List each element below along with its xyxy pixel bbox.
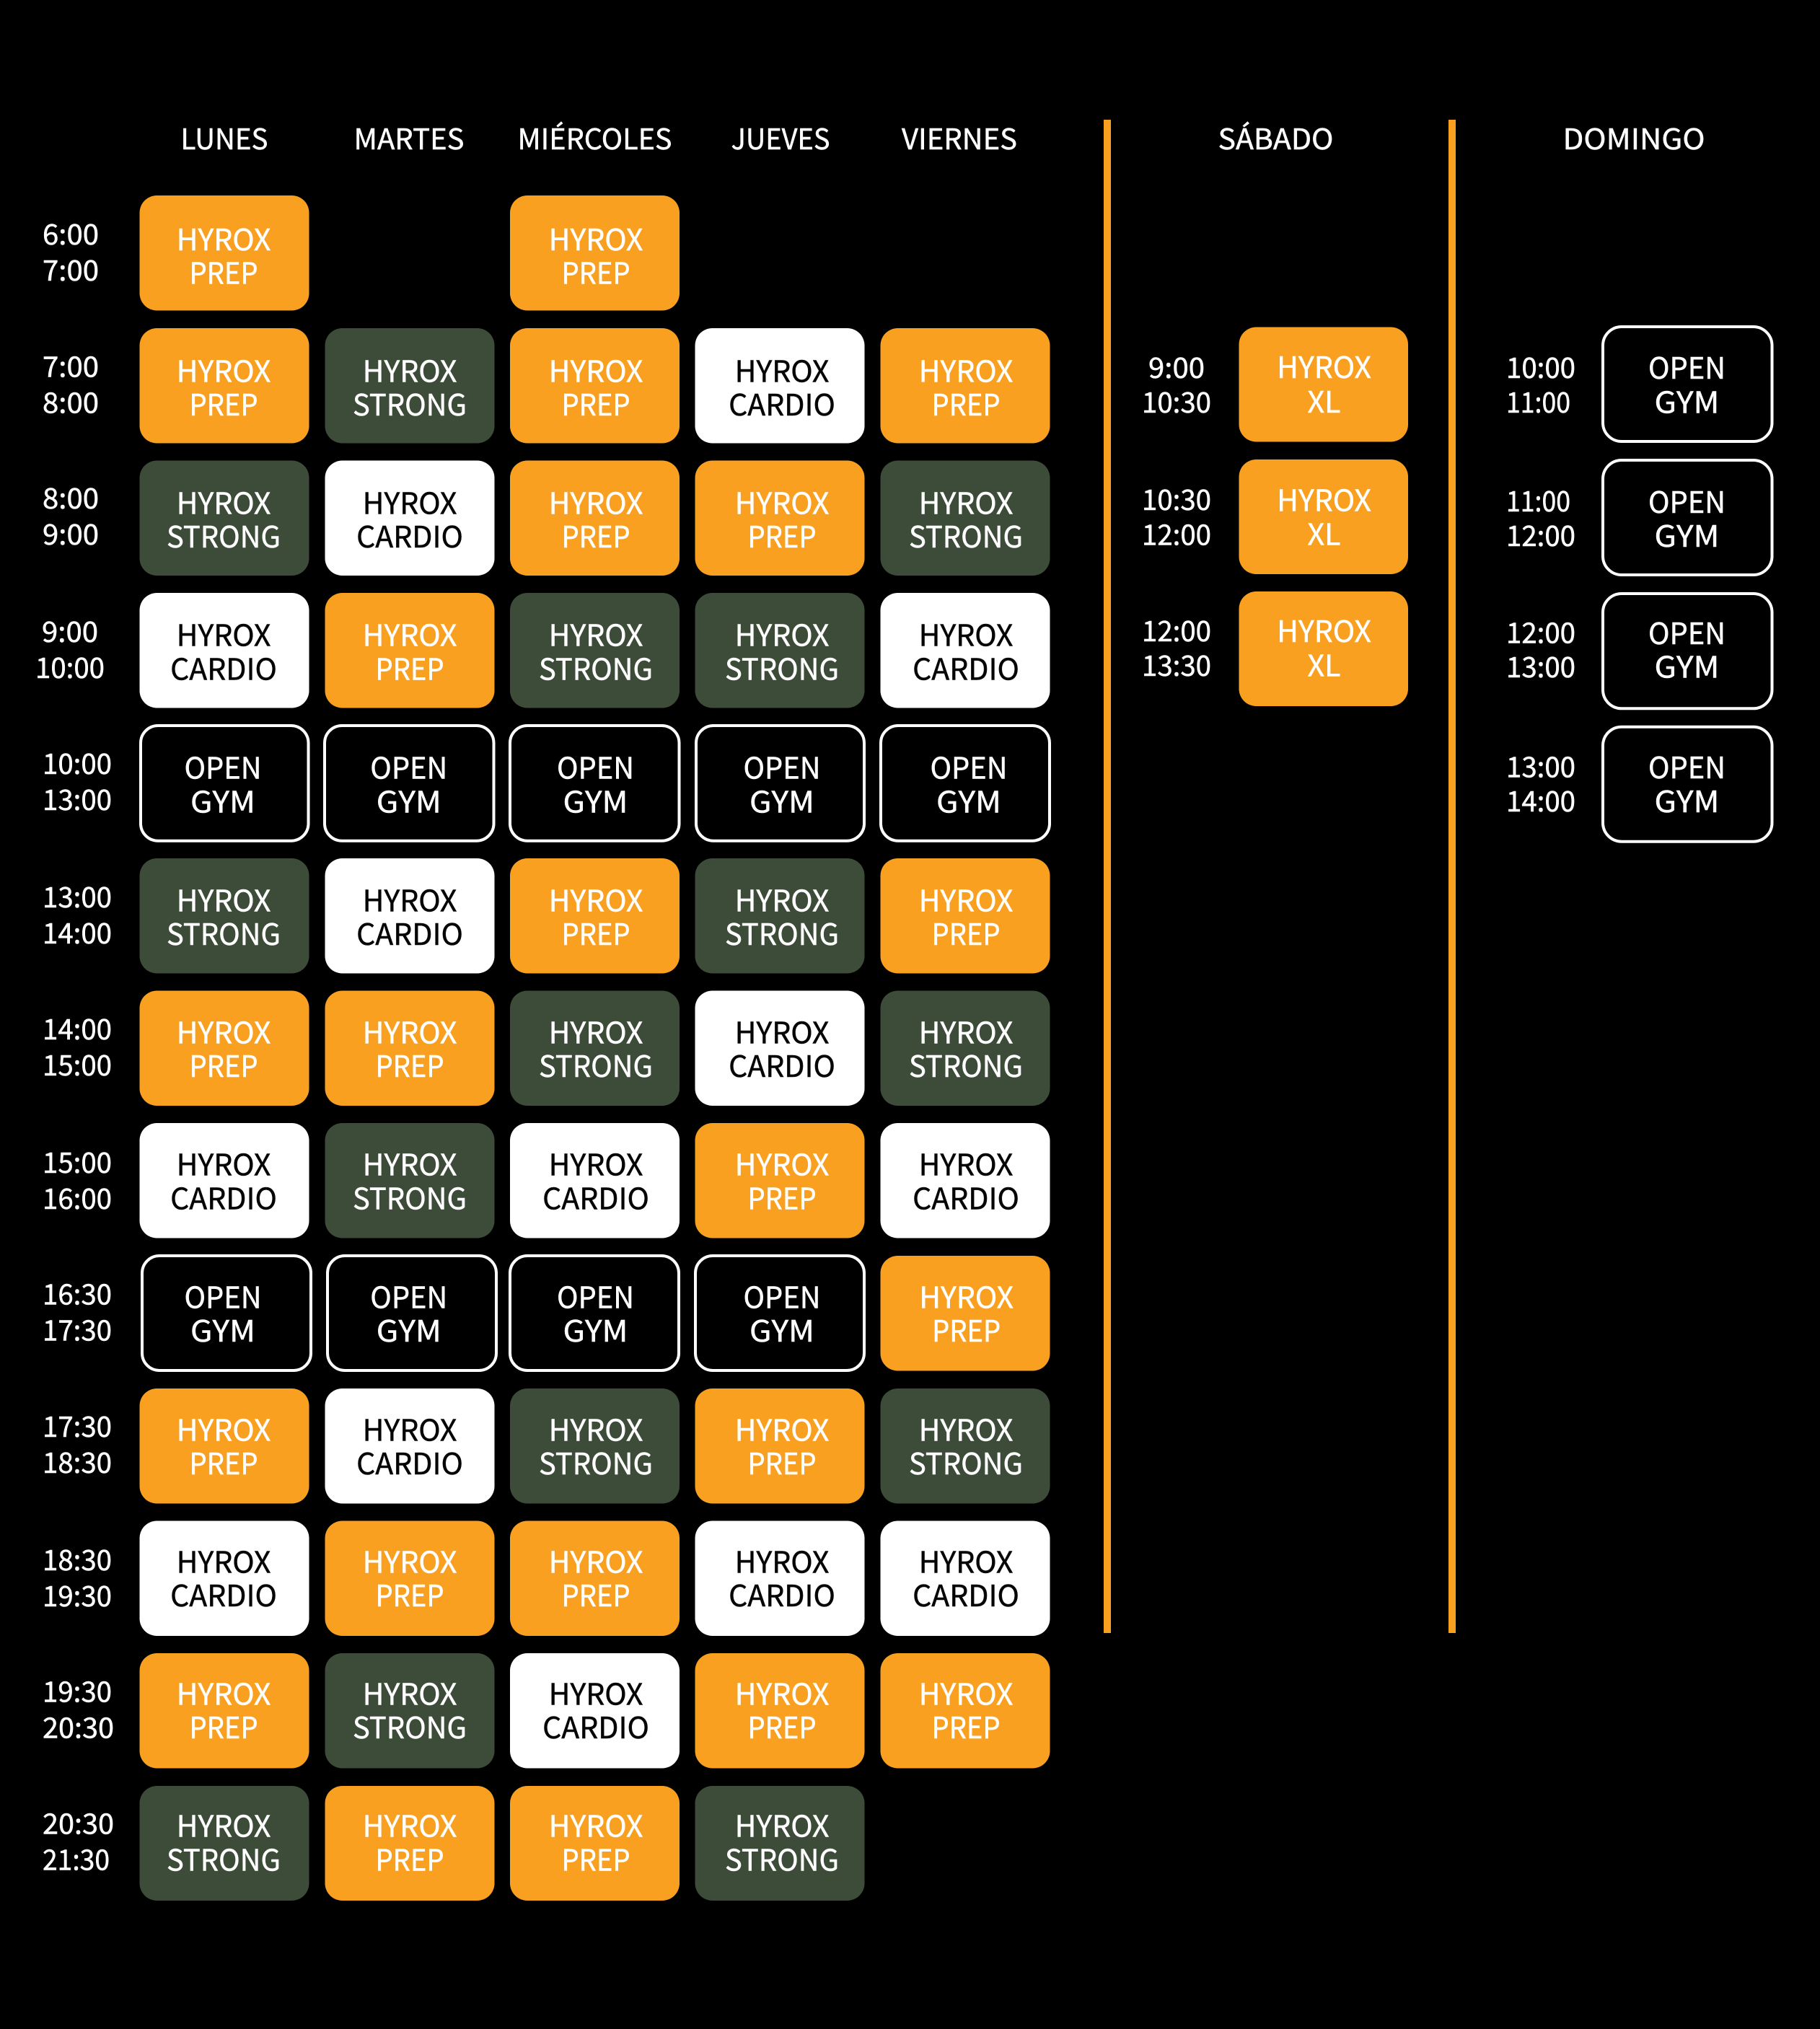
Viernes cardio (880, 1520, 1050, 1636)
Jueves prep: HYROX (735, 1670, 829, 1713)
row 17:30-18:30 (43, 1388, 1050, 1503)
Viernes prep: PREP (932, 1307, 1001, 1350)
Domingo open gym 2 (1603, 460, 1772, 575)
row 15:00-16:00 (43, 1123, 1050, 1238)
Martes strong: HYROX (363, 348, 457, 391)
Domingo open gym 4: OPEN (1648, 744, 1726, 787)
time 12:00-13:00 (1506, 611, 1575, 686)
time 14:00-15:00: 15:00 (43, 1043, 112, 1084)
Viernes cardio: CARDIO (913, 1572, 1019, 1615)
Lunes strong: STRONG (167, 910, 281, 954)
Jueves open gym: GYM (749, 1307, 814, 1350)
Martes strong (325, 1123, 495, 1238)
Viernes cardio (880, 1123, 1050, 1238)
Jueves open gym (695, 1256, 864, 1370)
Lunes cardio: CARDIO (170, 1572, 277, 1615)
Martes strong: STRONG (353, 1174, 467, 1218)
Lunes cardio (140, 1123, 309, 1238)
Lunes cardio: HYROX (177, 612, 271, 655)
Jueves open gym: OPEN (743, 744, 821, 788)
Martes cardio (325, 1388, 495, 1503)
Martes prep (325, 991, 495, 1106)
row 20:30-21:30 (43, 1786, 864, 1901)
Lunes open gym (141, 726, 309, 841)
time 18:30-19:30: 19:30 (43, 1574, 112, 1615)
Martes cardio (325, 460, 495, 576)
Martes cardio: HYROX (363, 479, 457, 522)
time 8:00-9:00: 9:00 (43, 512, 99, 553)
time 11:00-12:00: 11:00 (1506, 479, 1570, 520)
Lunes prep: PREP (189, 381, 258, 424)
time 9:00-10:30: 9:00 (1148, 345, 1205, 387)
time 9:00-10:00: 10:00 (35, 646, 105, 687)
day headers: JUEVES (731, 117, 830, 158)
Lunes cardio: CARDIO (170, 645, 277, 688)
Sábado XL 2: XL (1307, 511, 1340, 554)
time 10:00-13:00 (43, 741, 112, 819)
Jueves cardio: HYROX (735, 1538, 829, 1581)
time 10:30-12:00: 12:00 (1142, 512, 1211, 554)
Domingo open gym 2: OPEN (1648, 478, 1726, 521)
Miércoles prep (510, 328, 680, 443)
Domingo open gym 4: GYM (1655, 778, 1720, 821)
Miércoles strong: HYROX (549, 1008, 643, 1052)
Viernes prep (880, 328, 1050, 443)
Martes prep: HYROX (363, 612, 457, 655)
Jueves prep: HYROX (735, 1141, 829, 1184)
Jueves strong: STRONG (725, 910, 839, 954)
Jueves prep (695, 460, 864, 576)
Lunes open gym: GYM (190, 778, 255, 822)
Viernes prep: HYROX (919, 348, 1013, 391)
Jueves cardio: CARDIO (729, 1042, 835, 1086)
Miércoles prep: PREP (561, 250, 630, 293)
Jueves prep: HYROX (735, 1406, 829, 1449)
Miércoles prep: PREP (561, 910, 630, 954)
Jueves open gym: OPEN (743, 1273, 821, 1316)
time 12:00-13:30 (1142, 609, 1211, 685)
Miércoles prep: PREP (561, 1836, 630, 1879)
Lunes strong: STRONG (167, 1836, 281, 1879)
Sábado XL 3 (1239, 591, 1408, 706)
Viernes strong: HYROX (919, 1008, 1013, 1052)
Martes open gym: GYM (377, 778, 441, 822)
time 16:30-17:30: 17:30 (43, 1308, 112, 1350)
Martes cardio: CARDIO (356, 1440, 463, 1483)
Martes strong: HYROX (363, 1141, 457, 1184)
Miércoles prep: HYROX (549, 348, 643, 391)
Miércoles prep (510, 460, 680, 576)
Jueves cardio (695, 991, 864, 1106)
Miércoles strong (510, 593, 680, 708)
divider: weekdays and Saturday (1104, 120, 1111, 1633)
Viernes cardio: HYROX (919, 612, 1013, 655)
Lunes strong (140, 858, 309, 974)
Sábado XL 1 (1239, 327, 1408, 441)
time 19:30-20:30 (43, 1669, 114, 1746)
Miércoles open gym (510, 1256, 679, 1370)
Martes prep (325, 1520, 495, 1636)
Lunes prep (140, 328, 309, 443)
Jueves strong (695, 858, 864, 974)
day headers: VIERNES (902, 117, 1017, 158)
Lunes open gym: OPEN (185, 1273, 261, 1316)
Martes cardio (325, 858, 495, 974)
Jueves prep (695, 1388, 864, 1503)
time 9:00-10:00 (35, 609, 105, 687)
Miércoles prep (510, 1520, 680, 1636)
Martes open gym: OPEN (370, 1273, 447, 1316)
Jueves cardio: HYROX (735, 1008, 829, 1052)
Miércoles strong: HYROX (549, 1406, 643, 1449)
panel: Domingo (1506, 327, 1772, 842)
Viernes prep (880, 858, 1050, 974)
Miércoles open gym: GYM (563, 778, 628, 822)
Viernes cardio: CARDIO (913, 1174, 1019, 1218)
day headers: SÁBADO (1218, 117, 1333, 158)
Martes cardio: CARDIO (356, 910, 463, 954)
Miércoles strong: STRONG (539, 1042, 653, 1086)
row 16:30-17:30 (43, 1256, 1050, 1370)
Jueves open gym (696, 726, 864, 841)
Jueves cardio: CARDIO (729, 381, 835, 424)
Miércoles cardio (510, 1653, 680, 1769)
Viernes prep: PREP (932, 381, 1000, 424)
time 12:00-13:30: 12:00 (1142, 609, 1211, 650)
Jueves strong: HYROX (735, 1803, 829, 1846)
Martes strong (325, 1653, 495, 1769)
Domingo open gym 3 (1603, 594, 1772, 708)
Martes prep: PREP (375, 645, 444, 688)
Lunes prep (140, 991, 309, 1106)
time 20:30-21:30: 21:30 (43, 1838, 110, 1879)
panel: Sábado (1142, 327, 1408, 706)
Viernes open gym (881, 726, 1050, 841)
row 6:00-7:00 (43, 195, 680, 310)
time 15:00-16:00: 15:00 (43, 1140, 112, 1181)
Lunes open gym (142, 1256, 311, 1370)
time 17:30-18:30: 17:30 (43, 1404, 112, 1445)
Lunes prep (140, 1653, 309, 1769)
Jueves strong: STRONG (725, 1836, 839, 1879)
time 18:30-19:30 (43, 1538, 112, 1615)
Miércoles prep: HYROX (549, 877, 643, 920)
Lunes prep: HYROX (177, 1406, 271, 1449)
time 12:00-13:00: 12:00 (1506, 611, 1575, 652)
Miércoles cardio (510, 1123, 680, 1238)
Martes strong: HYROX (363, 1670, 457, 1713)
row 14:00-15:00 (43, 991, 1050, 1106)
time 6:00-7:00: 6:00 (43, 212, 99, 253)
Viernes open gym: GYM (936, 778, 1001, 822)
Martes prep: HYROX (363, 1008, 457, 1052)
row 9:00-10:00 (35, 593, 1050, 708)
Martes prep (325, 1786, 495, 1901)
Viernes strong (880, 460, 1050, 576)
Jueves prep: PREP (747, 1440, 817, 1483)
time 19:30-20:30: 20:30 (43, 1705, 114, 1746)
time 6:00-7:00 (43, 212, 99, 289)
Martes strong: STRONG (353, 381, 467, 424)
Lunes prep: HYROX (177, 216, 271, 259)
day headers: LUNES (180, 117, 268, 158)
Miércoles open gym (510, 726, 680, 841)
Domingo open gym 1: OPEN (1648, 344, 1726, 387)
time 20:30-21:30: 20:30 (43, 1802, 114, 1843)
Domingo open gym 1 (1603, 327, 1772, 441)
Jueves cardio: HYROX (735, 348, 829, 391)
Viernes prep (880, 1653, 1050, 1769)
Lunes strong (140, 460, 309, 576)
time 10:30-12:00 (1142, 477, 1211, 554)
Martes prep: PREP (375, 1042, 444, 1086)
Jueves cardio (695, 328, 864, 443)
divider: Saturday and Sunday (1448, 120, 1456, 1633)
Jueves prep: HYROX (735, 479, 829, 522)
Miércoles prep: HYROX (549, 479, 643, 522)
Martes open gym (327, 1256, 496, 1370)
Viernes cardio: CARDIO (913, 645, 1019, 688)
time 16:30-17:30 (43, 1272, 112, 1350)
Viernes strong: STRONG (909, 513, 1023, 556)
Viernes strong: STRONG (909, 1440, 1023, 1483)
Martes prep: PREP (375, 1572, 444, 1615)
Miércoles open gym: OPEN (557, 1273, 634, 1316)
time 11:00-12:00: 12:00 (1506, 514, 1575, 555)
Jueves prep (695, 1123, 864, 1238)
Lunes prep: HYROX (177, 1670, 271, 1713)
Lunes strong: HYROX (177, 877, 271, 920)
time 10:30-12:00: 10:30 (1142, 477, 1211, 519)
Lunes cardio: HYROX (177, 1538, 271, 1581)
Domingo open gym 3: OPEN (1648, 609, 1726, 653)
Martes prep: PREP (375, 1836, 444, 1879)
time 6:00-7:00: 7:00 (43, 248, 99, 289)
time 9:00-10:30 (1142, 345, 1211, 421)
Viernes open gym: OPEN (931, 744, 1007, 788)
Jueves strong: STRONG (725, 645, 839, 688)
time 12:00-13:30: 13:30 (1142, 643, 1211, 685)
Martes cardio: CARDIO (356, 513, 463, 556)
row 7:00-8:00 (43, 328, 1050, 443)
time 11:00-12:00 (1506, 479, 1575, 555)
Lunes strong: STRONG (167, 513, 281, 556)
Jueves cardio (695, 1520, 864, 1636)
Miércoles prep (510, 195, 680, 310)
time 15:00-16:00 (43, 1140, 112, 1218)
Viernes cardio: HYROX (919, 1141, 1013, 1184)
Jueves strong: HYROX (735, 877, 829, 920)
Jueves strong (695, 1786, 864, 1901)
Lunes prep: PREP (189, 1704, 258, 1747)
Miércoles prep: PREP (561, 381, 630, 424)
time 10:00-13:00: 10:00 (43, 741, 112, 783)
Lunes cardio (140, 593, 309, 708)
Miércoles strong: STRONG (539, 1440, 653, 1483)
Jueves prep (695, 1653, 864, 1769)
Jueves prep: PREP (747, 1704, 817, 1747)
time 17:30-18:30 (43, 1404, 112, 1482)
Jueves prep: PREP (747, 513, 817, 556)
row 10:00-13:00 (43, 726, 1050, 841)
Viernes prep: PREP (932, 910, 1000, 954)
Lunes prep (140, 195, 309, 310)
time 16:30-17:30: 16:30 (43, 1272, 112, 1313)
Jueves cardio: CARDIO (729, 1572, 835, 1615)
time 13:00-14:00: 14:00 (1506, 779, 1575, 820)
Lunes strong (140, 1786, 309, 1901)
time 18:30-19:30: 18:30 (43, 1538, 112, 1579)
day headers: MARTES (353, 117, 465, 158)
Miércoles cardio: HYROX (549, 1670, 643, 1713)
Miércoles strong: HYROX (549, 612, 643, 655)
Viernes prep (880, 1256, 1050, 1370)
Martes prep (325, 593, 495, 708)
Viernes prep: PREP (932, 1704, 1000, 1747)
Viernes prep: HYROX (919, 877, 1013, 920)
time 10:00-11:00 (1506, 345, 1575, 421)
Martes strong: STRONG (353, 1704, 467, 1747)
Lunes prep: PREP (189, 250, 258, 293)
Sábado XL 3: HYROX (1277, 607, 1371, 651)
Viernes strong: HYROX (919, 1406, 1013, 1449)
Lunes cardio (140, 1520, 309, 1636)
Martes open gym (325, 726, 493, 841)
time 13:00-14:00: 13:00 (43, 875, 112, 916)
time 19:30-20:30: 19:30 (43, 1669, 112, 1710)
Jueves prep: PREP (747, 1174, 817, 1218)
Lunes open gym: OPEN (185, 744, 261, 788)
Lunes prep: PREP (189, 1042, 258, 1086)
Miércoles open gym: GYM (563, 1307, 628, 1350)
Sábado XL 2: HYROX (1277, 476, 1371, 519)
Viernes cardio (880, 593, 1050, 708)
Sábado XL 3: XL (1307, 642, 1340, 685)
time 13:00-14:00: 14:00 (43, 911, 112, 952)
time 9:00-10:00: 9:00 (42, 609, 98, 651)
Viernes cardio: HYROX (919, 1538, 1013, 1581)
Viernes prep: HYROX (919, 1273, 1014, 1316)
Miércoles prep: HYROX (549, 216, 643, 259)
Miércoles strong: STRONG (539, 645, 653, 688)
time 20:30-21:30 (43, 1802, 114, 1879)
Viernes strong (880, 1388, 1050, 1503)
time 9:00-10:30: 10:30 (1142, 380, 1211, 421)
Viernes prep: HYROX (919, 1670, 1013, 1713)
Martes prep: HYROX (363, 1538, 457, 1581)
Martes cardio: HYROX (363, 877, 457, 920)
Martes prep: HYROX (363, 1803, 457, 1846)
Miércoles open gym: OPEN (557, 744, 634, 788)
Miércoles cardio: HYROX (549, 1141, 643, 1184)
Martes strong (325, 328, 495, 443)
time 8:00-9:00 (43, 476, 99, 553)
Lunes cardio: CARDIO (170, 1174, 277, 1218)
Lunes prep: HYROX (177, 1008, 271, 1052)
day headers: DOMINGO (1562, 117, 1705, 158)
time 10:00-11:00: 11:00 (1506, 380, 1570, 421)
row 19:30-20:30 (43, 1653, 1050, 1769)
day headers (180, 117, 1705, 158)
Lunes prep: PREP (189, 1440, 258, 1483)
time 10:00-13:00: 13:00 (43, 778, 112, 819)
Miércoles cardio: CARDIO (542, 1704, 649, 1747)
time 13:00-14:00 (1506, 745, 1575, 820)
time 7:00-8:00 (43, 345, 99, 421)
Jueves strong (695, 593, 864, 708)
Miércoles prep: HYROX (549, 1803, 643, 1846)
time 10:00-11:00: 10:00 (1506, 345, 1575, 387)
Miércoles strong (510, 1388, 680, 1503)
row 18:30-19:30 (43, 1520, 1050, 1636)
Martes open gym: OPEN (370, 744, 447, 788)
Martes cardio: HYROX (363, 1406, 457, 1449)
time 13:00-14:00: 13:00 (1506, 745, 1575, 786)
Viernes strong: STRONG (909, 1042, 1023, 1086)
Domingo open gym 2: GYM (1655, 512, 1720, 555)
Lunes prep: HYROX (177, 348, 271, 391)
Martes open gym: GYM (377, 1307, 441, 1350)
Sábado XL 2 (1239, 459, 1408, 574)
Domingo open gym 1: GYM (1655, 379, 1720, 422)
Miércoles prep (510, 858, 680, 974)
Jueves strong: HYROX (735, 612, 829, 655)
row 8:00-9:00 (43, 460, 1050, 576)
Viernes strong (880, 991, 1050, 1106)
Miércoles prep (510, 1786, 680, 1901)
Jueves open gym: GYM (749, 778, 814, 822)
Sábado XL 1: HYROX (1277, 343, 1371, 387)
Lunes open gym: GYM (190, 1307, 255, 1350)
time 14:00-15:00 (43, 1007, 112, 1084)
time 7:00-8:00: 7:00 (43, 345, 99, 385)
Viernes strong: HYROX (919, 479, 1013, 522)
time 17:30-18:30: 18:30 (43, 1440, 112, 1482)
Miércoles prep: PREP (561, 1572, 630, 1615)
day headers: MIÉRCOLES (518, 117, 672, 158)
Lunes strong: HYROX (177, 1803, 271, 1846)
time 8:00-9:00: 8:00 (43, 476, 99, 517)
Miércoles prep: PREP (561, 513, 630, 556)
row 13:00-14:00 (43, 858, 1050, 974)
Lunes cardio: HYROX (177, 1141, 271, 1184)
Miércoles strong (510, 991, 680, 1106)
Lunes prep (140, 1388, 309, 1503)
time 12:00-13:00: 13:00 (1506, 645, 1575, 686)
Domingo open gym 4 (1603, 727, 1772, 842)
time 14:00-15:00: 14:00 (43, 1007, 112, 1048)
Sábado XL 1: XL (1307, 378, 1340, 421)
Miércoles prep: HYROX (549, 1538, 643, 1581)
time 15:00-16:00: 16:00 (43, 1176, 112, 1218)
Lunes strong: HYROX (177, 479, 271, 522)
time 13:00-14:00 (43, 875, 112, 952)
time 7:00-8:00: 8:00 (43, 381, 99, 421)
Domingo open gym 3: GYM (1655, 643, 1720, 687)
Miércoles cardio: CARDIO (542, 1174, 649, 1218)
